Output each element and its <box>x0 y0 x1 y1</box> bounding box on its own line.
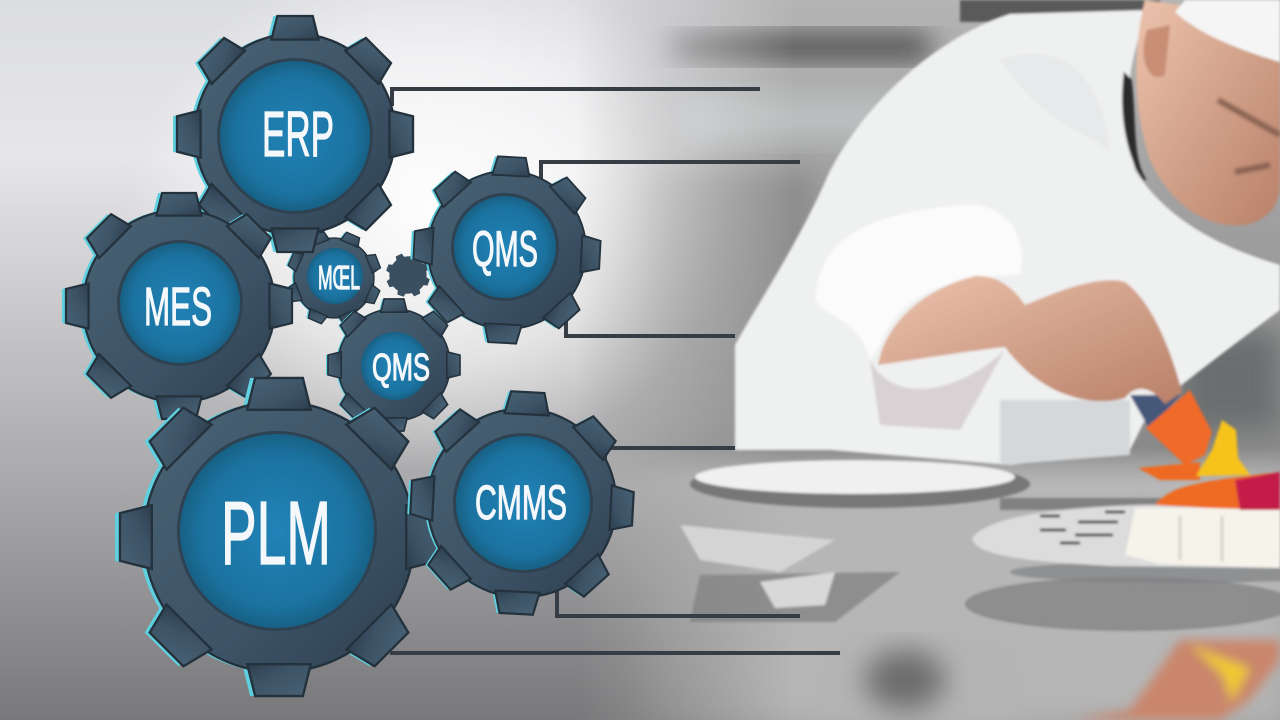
counter reflection plates <box>680 525 835 572</box>
chef head <box>1136 0 1280 225</box>
gear: MES <box>62 193 292 419</box>
label: QMS: QMS <box>472 221 538 277</box>
line: CMMS bottom <box>557 590 800 616</box>
dark counter edge <box>1000 498 1280 510</box>
line: QMS top <box>541 162 800 182</box>
top shadow above shoulder <box>960 0 1160 22</box>
gear: ERP <box>173 16 413 252</box>
line: QMS bottom <box>566 320 735 336</box>
left plate <box>690 460 1030 508</box>
large reflection ring on counter <box>965 577 1280 631</box>
chef arm and hand <box>878 276 1182 404</box>
label: MOEL: MŒL <box>318 259 360 296</box>
gear: tiny connector <box>380 247 436 303</box>
label: CMMS: CMMS <box>475 477 567 530</box>
label: MES: MES <box>144 277 212 337</box>
gear: PLM <box>115 378 438 696</box>
photo: kitchen background <box>597 0 1280 720</box>
dessert <box>1125 390 1280 568</box>
gear: QMS <box>406 152 605 348</box>
chef hat <box>1175 0 1280 62</box>
coat folds <box>815 204 1022 360</box>
connector lines <box>390 89 840 653</box>
line: PLM <box>390 651 840 655</box>
gear: MOEL small <box>270 216 396 340</box>
gear: CMMS <box>402 386 639 620</box>
line: ERP <box>392 89 760 106</box>
dessert plate <box>972 505 1280 583</box>
label: QMS small: QMS <box>372 347 430 389</box>
gear: QMS small <box>326 299 460 431</box>
line: CMMS top <box>605 448 735 470</box>
label: ERP: ERP <box>262 98 334 170</box>
label: PLM: PLM <box>221 484 331 584</box>
dessert reflection <box>1070 640 1280 720</box>
chef coat <box>735 10 1280 465</box>
